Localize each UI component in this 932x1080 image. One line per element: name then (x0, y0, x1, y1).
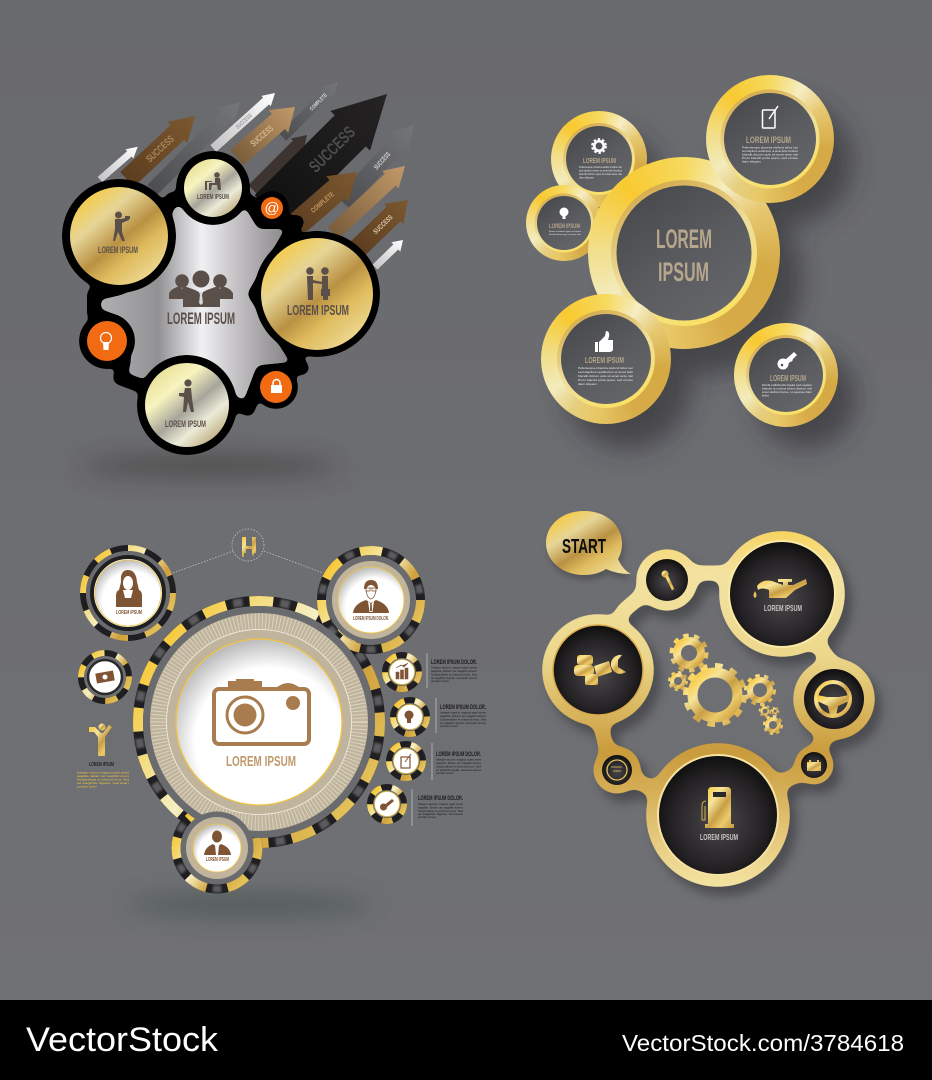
footer url: VectorStock.com/3784618 (622, 1030, 904, 1056)
small item: note: at sagittis ligula. Aenean amet (436, 768, 481, 772)
small item: bulb: at sagittis ligula. Aenean amet (440, 721, 486, 725)
arrows: COMPLETE (309, 92, 329, 112)
small item: bulb: porttitor lorem (440, 724, 459, 728)
satellite: top left woman (83, 548, 173, 638)
small item: key: sagittis. Etiam ac sagittis lorem (418, 806, 464, 810)
ring: bottom left: sed dapibus vestibulum et amet felis (578, 370, 634, 374)
ring: top left: blandit dictum quis sit amet ante nisi (579, 172, 622, 176)
ring: bottom right: blandit ut cursus lorem dictum nisi (762, 386, 813, 390)
satellite segments: top right (322, 550, 420, 650)
ring: small left (526, 185, 602, 261)
disc: fuel: LOREM IPSUM (700, 833, 738, 842)
gears (669, 636, 782, 734)
panel: gold automotive chain (542, 511, 875, 887)
gold man with flag: Suspendisse et euismod eros. Sed (77, 778, 130, 782)
circle: top pale (184, 159, 242, 217)
ring: center (588, 157, 780, 349)
ring: top right: blandit dictum quis sit amet ante nisi (742, 152, 798, 156)
gear: tiny one (760, 706, 770, 716)
gear: lower right (764, 716, 782, 734)
small item: bulb: Suspendisse et euismod eros. Sed (440, 718, 487, 722)
small item: note: Integer auctor magna eget amet (436, 758, 481, 762)
start bubble: START (562, 536, 606, 558)
team icon (169, 270, 233, 307)
small item: chart: at sagittis ligula. Aenean amet (431, 676, 477, 680)
ring: bottom left: diam aliquam (578, 382, 598, 386)
floor shadow (125, 895, 375, 915)
orange icon: bulb (87, 321, 127, 361)
small item: chart (385, 653, 478, 689)
arrows: SUCCESS (248, 123, 275, 148)
disc: gauge (602, 755, 632, 785)
arrows: SUCCESS (144, 134, 177, 165)
ring: center: LOREM (656, 224, 712, 254)
small item: key: Integer auctor magna eget amet (418, 802, 463, 806)
gear: right (746, 676, 774, 704)
satellite: bottom man (180, 812, 254, 884)
ring: bottom right (734, 323, 838, 427)
small item: chart: sagittis. Etiam ac sagittis lorem (431, 669, 478, 673)
small item: bulb (393, 698, 487, 734)
black frame (62, 151, 380, 455)
connector lines and top icon (173, 529, 323, 573)
small item: key: Suspendisse et euismod eros. Sed (418, 809, 464, 813)
circle: right gold: LOREM IPSUM (287, 302, 349, 319)
gold man with flag: Integer aucor magna eget amet (77, 770, 129, 774)
small item: chart: Integer auctor magna eget amet (431, 666, 477, 670)
ring: bottom right: felis (762, 394, 770, 398)
main wheel segments (138, 601, 380, 843)
disc: fuel (658, 755, 778, 875)
orange icon: at sign (261, 197, 283, 219)
footer brand: VectorStock (26, 1021, 219, 1059)
arrows: SUCCESS (372, 214, 395, 236)
ring: bottom left: blandit dictum quis sit amet ante nisi (578, 374, 633, 378)
small item: bulb: sagittis. Etiam ac sagittis lorem (440, 714, 487, 718)
satellite: top right man (327, 556, 415, 644)
ring: top left (551, 111, 647, 207)
floor shadow (80, 456, 340, 476)
small item: chart: LOREM IPSUM DOLOR. (431, 659, 477, 666)
ring: bottom left: Pellentesque pharetra eleifend tellus nec (578, 366, 634, 370)
small item: note: LOREM IPSUM DOLOR. (436, 751, 481, 758)
footer bar (0, 1000, 932, 1080)
ring: bottom left: LOREM IPSUM (585, 355, 624, 365)
panel: arrows and metal blob (62, 74, 424, 476)
ring: top right: LOREM IPSUM (746, 135, 791, 146)
disc: oil: LOREM IPSUM (764, 604, 802, 613)
disc: key (646, 559, 688, 601)
orange icon: lock (260, 371, 292, 403)
ring: top left: LOREM IPSUM (583, 156, 616, 165)
gear: tiny two (771, 707, 779, 715)
ring: small left: Mauris vestibulum ligula sed sapien (549, 230, 582, 233)
circle: top pale: LOREM IPSUM (197, 192, 229, 201)
icon: camera (214, 679, 309, 744)
small item: note (389, 743, 482, 780)
ring: bottom left (541, 294, 671, 424)
chain body (542, 531, 875, 887)
small item: key (370, 787, 464, 826)
ring: top right (706, 75, 834, 203)
ring: bottom right: LOREM IPSUM (770, 374, 806, 383)
small item: key: at sagittis ligula. Aenean (418, 812, 464, 816)
circle: bottom pale: LOREM IPSUM (165, 419, 206, 429)
arrows: COMPLETE (310, 191, 336, 215)
gold man with flag: porttitor lorem (77, 784, 98, 788)
gold man with flag: LOREM IPSUM (89, 762, 114, 768)
disc: battery (801, 752, 827, 778)
gold man with flag: at sagittis ligula. Aenean (77, 781, 130, 785)
small item: chart: porttitor lorem (431, 679, 450, 683)
circle: bottom pale (145, 363, 229, 447)
arrows: SUCCESS (235, 113, 254, 131)
circle: right gold (261, 238, 373, 350)
small item: bulb: Integer auctor magna eget amet (440, 710, 486, 714)
ring: bottom right: Morbi sollicitudin ligula sed sapien (762, 383, 813, 387)
panel: segmented camera wheel (77, 529, 487, 915)
ring: bottom left: Proin blandit porta quam, sed ornare (578, 378, 634, 382)
disc: wrench (553, 625, 643, 715)
orange icon: at sign: @ (264, 200, 280, 217)
satellite: bottom man: LOREM IPSUM (206, 857, 229, 863)
ring: center: IPSUM (658, 257, 709, 287)
ring: top right: Pellentesque pharetra eleifend tellus nec (742, 146, 799, 150)
arrows: SUCCESS (373, 151, 392, 171)
satellite: top left woman: LOREM IPSUM (116, 610, 142, 616)
gold man with flag: sagittis. Etiam ac sagittis lorem (77, 774, 130, 778)
small item: key: porttitor lorem (418, 815, 437, 819)
circle: left gold: LOREM IPSUM (98, 245, 138, 255)
main wheel face (143, 606, 375, 838)
silver blob (94, 199, 302, 409)
circle: left gold (70, 187, 168, 285)
small item: bulb: LOREM IPSUM DOLOR. (440, 704, 486, 711)
arrows (96, 74, 424, 272)
ring: small left: LOREM IPSUM (549, 223, 580, 230)
ring: top left: diam aliquam (579, 176, 594, 180)
main label: LOREM IPSUM (226, 754, 296, 770)
ring: top left: sed dapibus mauris ut amet felis tincidunt (579, 168, 622, 172)
satellite: money (81, 653, 129, 701)
panel: gold rings (526, 75, 856, 449)
satellite segments: bottom (176, 807, 258, 889)
arrows: SUCCESS (305, 123, 359, 176)
ring: bottom right: amet eleifend lacus, ut egestas diam (762, 390, 812, 394)
small item: note: sagittis. Etiam ac sagittis lorem (436, 761, 482, 765)
disc: oil (729, 541, 835, 647)
center label: LOREM IPSUM (167, 310, 235, 328)
ring: top left: Pellentesque pharetra eleifend tellus nec (579, 165, 623, 169)
start bubble (546, 511, 633, 580)
satellite: top right man: LOREM IPSUM DOLOR. (353, 616, 389, 622)
gear: left small (669, 672, 687, 690)
ring: small left: blandit dictum quis sit amet ante (549, 233, 582, 236)
small item: note: porttitor lorem (436, 771, 455, 775)
small item: key: LOREM IPSUM DOLOR. (418, 795, 463, 802)
small item: note: Suspendisse et euismod eros. Sed (436, 764, 482, 768)
disc: steering wheel (804, 669, 864, 729)
ring: top right: diam aliquam (742, 160, 762, 164)
gold man with flag (77, 724, 130, 788)
ring: top right: Proin blandit porta quam, sed ornare (742, 156, 798, 160)
ring shadows (565, 100, 856, 449)
gear: large (686, 666, 744, 724)
gear: upper (672, 636, 706, 670)
ring: top right: sed dapibus vestibulum ut amet felis tincidunt (742, 149, 798, 153)
small item: chart: Suspendisse et euismod eros. Sed (431, 672, 478, 676)
